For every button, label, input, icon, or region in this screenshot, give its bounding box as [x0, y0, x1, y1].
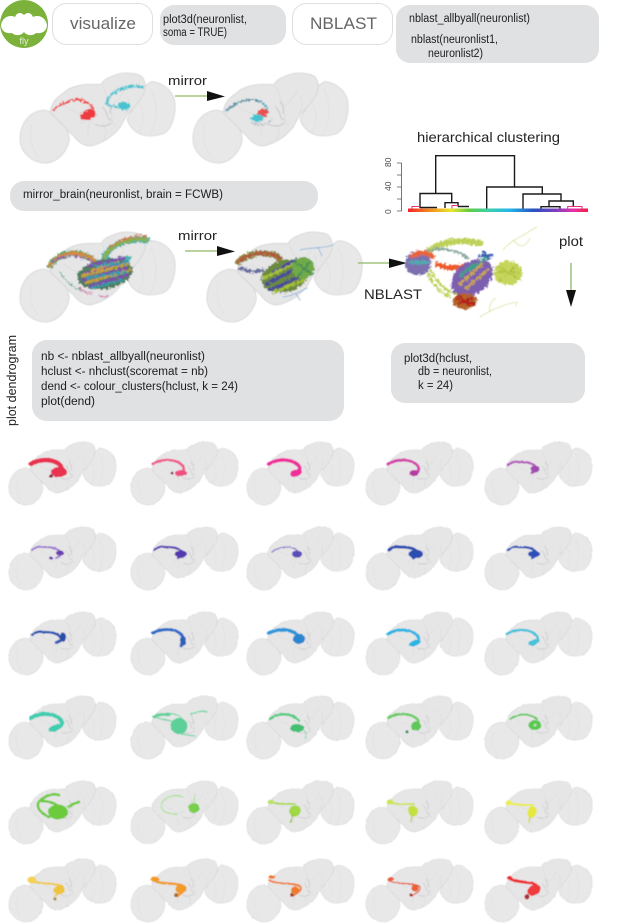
code box: mirror_brain: [10, 181, 318, 211]
cluster 17: [131, 696, 238, 759]
cluster cloud: clustered neurons: [405, 227, 537, 317]
code box: nblast: nblast(neuronlist1,: [411, 34, 498, 46]
cluster 27: [131, 859, 238, 922]
arrow: NBLAST: [358, 258, 407, 268]
cluster 3: [247, 442, 354, 505]
code box: plot3d hclust: [391, 343, 585, 403]
cluster 20: [485, 696, 592, 759]
arrow: plot: [566, 263, 576, 307]
brain: mirrored neurons: [193, 73, 348, 163]
code box: dendrogram: [32, 340, 344, 421]
label: NBLAST: NBLAST: [364, 286, 422, 302]
cluster 7: [131, 527, 238, 590]
label: plot dendrogram: plot dendrogram: [5, 335, 19, 426]
cluster 25: [485, 781, 592, 844]
code box: nblast: nblast_allbyall(neuronlist): [409, 13, 530, 25]
cluster 5: [485, 442, 592, 505]
cluster 9: [366, 527, 473, 590]
button: visualize: visualize: [70, 14, 136, 33]
code box: plot3d: soma = TRUE): [163, 27, 227, 39]
arrow: mirror 2: mirror: [178, 228, 218, 243]
cluster 23: [247, 781, 354, 844]
code box: nblast: neuronlist2): [428, 48, 483, 60]
cluster 22: [131, 781, 238, 844]
cluster 6: [9, 527, 116, 590]
code box: dendrogram: hclust <- nhclust(scoremat = nb): [41, 366, 208, 378]
code box: mirror_brain: mirror_brain(neuronlist, brain = FCWB): [23, 189, 223, 201]
cluster 30: [485, 859, 592, 922]
cluster 26: [9, 859, 116, 922]
code box: plot3d hclust: db = neuronlist,: [418, 366, 492, 378]
chart: dendrogram: 0: [383, 209, 393, 214]
arrow: mirror 2: [178, 228, 235, 256]
code box: nblast: [396, 5, 599, 63]
icon: fly logo: fly: [20, 36, 29, 46]
cluster 2: [131, 442, 238, 505]
code box: dendrogram: nb <- nblast_allbyall(neuronlist): [41, 351, 205, 363]
code box: plot3d hclust: plot3d(hclust,: [404, 353, 472, 365]
cluster 19: [366, 696, 473, 759]
cluster 16: [9, 696, 116, 759]
code box: plot3d: [160, 5, 286, 45]
icon: fly logo: [0, 0, 48, 48]
label: plot: plot: [559, 233, 583, 249]
code box: dendrogram: dend <- colour_clusters(hclust, k = 24): [41, 381, 238, 393]
cluster 28: [247, 859, 354, 922]
cluster 15: [485, 612, 592, 675]
brain: all neurons: [20, 232, 175, 322]
code box: dendrogram: plot(dend): [41, 396, 95, 408]
heading: hierarchical clustering: hierarchical clustering: [417, 129, 560, 145]
cluster 11: [9, 612, 116, 675]
button: NBLAST: NBLAST: [310, 14, 377, 33]
cluster 29: [366, 859, 473, 922]
code box: plot3d hclust: k = 24): [418, 380, 453, 392]
chart: dendrogram: 80: [383, 157, 393, 167]
chart: dendrogram: [383, 156, 588, 214]
arrow: mirror: mirror: [168, 73, 208, 88]
grid: clusters small multiples: [9, 442, 592, 922]
cluster 18: [247, 696, 354, 759]
cluster 12: [131, 612, 238, 675]
cluster 14: [366, 612, 473, 675]
cluster 21: [9, 781, 116, 844]
brain: all neurons mirrored: [207, 232, 362, 322]
code box: plot3d: plot3d(neuronlist,: [163, 14, 247, 26]
chart: dendrogram: 40: [383, 181, 393, 191]
cluster 24: [366, 781, 473, 844]
cluster 10: [485, 527, 592, 590]
cluster 13: [247, 612, 354, 675]
cluster 8: [247, 527, 354, 590]
cluster 4: [366, 442, 473, 505]
cluster 1: [9, 442, 116, 505]
arrow: mirror: [168, 73, 225, 101]
brain: two neurons: [20, 73, 175, 163]
button: visualize: [52, 4, 152, 44]
button: NBLAST: [292, 4, 392, 44]
